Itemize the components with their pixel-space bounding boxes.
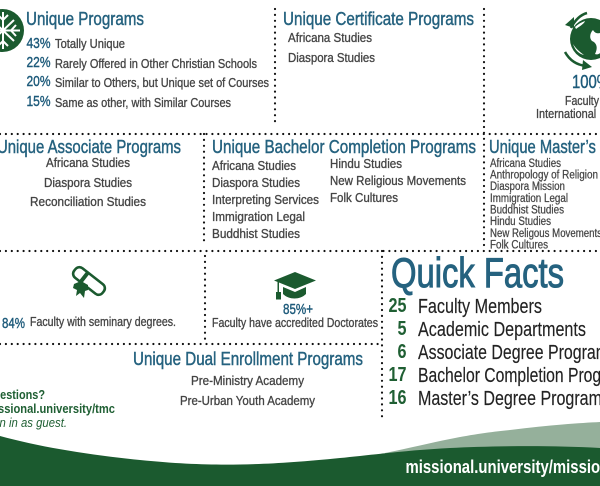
list: masters programs: Hindu Studies — [490, 216, 551, 228]
panel: international faculty — [536, 13, 600, 121]
fact: faculty members: Faculty Members — [418, 296, 542, 318]
list: bachelor column one: Buddhist Studies — [212, 226, 300, 241]
stat: 85 percent plus: 85%+ — [283, 302, 313, 318]
list: associate programs — [30, 155, 146, 209]
list: bachelor column one: Diaspora Studies — [212, 175, 300, 190]
callout: questions — [0, 387, 115, 430]
stat: 84 percent: 84% — [2, 316, 25, 332]
icon: globe with arrows — [565, 13, 600, 70]
panel: accredited doctorates — [212, 272, 378, 330]
list: bachelor column two: Folk Cultures — [330, 190, 398, 205]
panel: unique dual enrollment programs — [133, 348, 363, 408]
heading: bachelor completion programs: Unique Bachelor Completion Programs — [212, 136, 476, 157]
fact: academic departments: 5 — [398, 318, 406, 340]
list: dual enrollment programs — [180, 373, 315, 408]
panel: unique programs — [26, 8, 269, 110]
list: associate programs: Africana Studies — [46, 155, 130, 170]
heading: associate programs: Unique Associate Programs — [0, 136, 181, 157]
list: bachelor column one — [212, 158, 319, 241]
panel: unique masters programs — [489, 136, 600, 252]
heading: dual enrollment programs: Unique Dual Enrollment Programs — [133, 348, 363, 369]
panel: unique associate programs — [0, 136, 181, 209]
footer wave — [0, 422, 600, 486]
list: associate programs: Reconciliation Studies — [30, 194, 146, 209]
list: bachelor column two: New Religious Movements — [330, 173, 466, 188]
icon: graduation cap — [274, 272, 316, 300]
list: bachelor column two — [330, 156, 466, 205]
fact: bachelor completion programs: 17 — [388, 364, 406, 386]
list: certificate programs — [288, 30, 375, 65]
list: bachelor column one: Interpreting Services — [212, 192, 319, 207]
stat: 20 percent: 20% — [26, 74, 51, 90]
fact: faculty members — [388, 295, 542, 318]
panel: quick facts — [388, 249, 600, 410]
list: associate programs: Diaspora Studies — [44, 175, 132, 190]
list: masters programs — [490, 158, 600, 252]
panel: unique bachelor completion programs — [212, 136, 476, 241]
caption: accredited doctorates: Faculty have accredited Doctorates — [212, 315, 378, 330]
caption: faculty international experience — [536, 93, 600, 121]
list: dual enrollment programs: Pre-Urban Youth Academy — [180, 393, 315, 408]
heading: unique programs: Unique Programs — [26, 8, 144, 29]
caption: seminary degrees: Faculty with seminary degrees. — [30, 314, 176, 329]
panel: seminary degrees — [2, 265, 176, 332]
fact: masters degree programs: 16 — [388, 387, 406, 409]
list: masters programs: Buddhist Studies — [490, 204, 564, 216]
stat: 43 percent: 43% — [26, 36, 51, 52]
list: bachelor column one: Immigration Legal — [212, 209, 305, 224]
stat: 22 percent: Rarely Offered in Other Christian Schools — [55, 56, 257, 71]
stat: 22 percent: 22% — [26, 55, 51, 71]
list: bachelor column two: Hindu Studies — [330, 156, 402, 171]
list: dual enrollment programs: Pre-Ministry Academy — [191, 373, 304, 388]
list: masters programs: Immigration Legal — [490, 193, 568, 205]
fact: faculty members: 25 — [388, 295, 406, 317]
list: certificate programs: Diaspora Studies — [288, 50, 375, 65]
stat: 43 percent — [26, 36, 125, 52]
list: bachelor column one: Africana Studies — [212, 158, 296, 173]
icon: diploma — [71, 265, 107, 298]
stat: 15 percent: 15% — [26, 94, 51, 110]
stat: 43 percent: Totally Unique — [55, 36, 125, 51]
list: masters programs: Diaspora Mission — [490, 181, 565, 193]
list: masters programs: Africana Studies — [490, 158, 561, 170]
list: certificate programs: Africana Studies — [288, 30, 372, 45]
icon: snowflake badge — [0, 9, 24, 52]
stat: 20 percent: Similar to Others, but Unique set of Courses — [55, 75, 269, 90]
stat: 15 percent: Same as other, with Similar Courses — [55, 95, 231, 110]
heading: certificate programs: Unique Certificate Programs — [283, 8, 474, 29]
fact: associate degree programs: 6 — [398, 341, 406, 363]
panel: unique certificate programs — [283, 8, 474, 65]
list: masters programs: Folk Cultures — [490, 240, 548, 252]
